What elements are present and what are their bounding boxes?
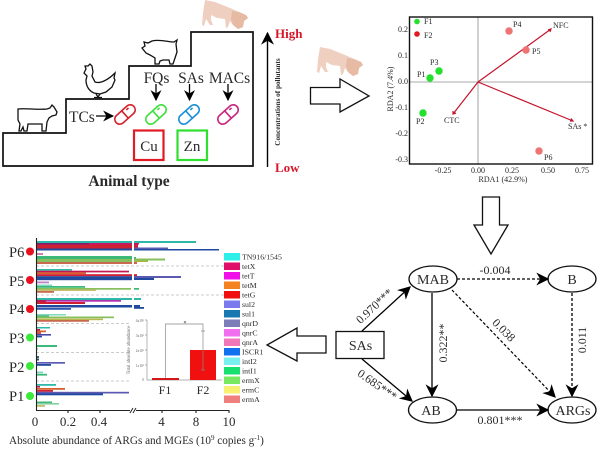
node: SAs: [336, 332, 384, 358]
coefficients: 0.322**: [436, 324, 450, 362]
x axis title: 9: [211, 434, 215, 442]
inset axes: [145, 320, 222, 380]
icon: chicken: [84, 64, 115, 98]
bars P1: [36, 384, 129, 407]
icon: photo pig middle: [317, 47, 363, 76]
bars P6: [36, 241, 219, 264]
inset tick labels: 0: [142, 378, 144, 382]
icon: blue capsule: [177, 103, 201, 126]
legend: qnrA: [242, 338, 258, 347]
y tick labels: -0.3: [395, 155, 408, 164]
arrow: MAB to ARGs: [452, 290, 555, 397]
RDA legend: F1: [424, 17, 432, 26]
inset tick labels: 4x10³: [136, 319, 145, 323]
arrow: MACs: [227, 84, 229, 100]
node: ARGs: ARGs: [555, 404, 591, 419]
green points: [419, 67, 443, 117]
arrow: AB to ARGs: [457, 409, 548, 411]
label: concentrations of pollutants: Concentrations of pollutants: [274, 58, 282, 146]
legend: qnrD: [242, 319, 258, 328]
legend: [224, 252, 282, 404]
legend: ermC: [242, 386, 259, 394]
icon: red capsule: [113, 103, 137, 126]
x tick labels: 10: [222, 414, 236, 429]
x axis title: ): [260, 435, 264, 447]
bars P2: [36, 356, 65, 376]
x tick labels: -0.25: [435, 166, 451, 175]
icon: cow: [18, 105, 57, 131]
axes: [36, 238, 230, 413]
sample labels and dots: P5: [9, 274, 24, 290]
arrow: B to ARGs: [571, 293, 573, 396]
legend: tetX: [242, 262, 256, 271]
node: AB: [408, 397, 456, 423]
sample labels and dots: P1: [9, 389, 24, 405]
point labels: P4: [513, 20, 521, 29]
legend: ermA: [242, 395, 260, 404]
y tick labels: 0.2: [398, 25, 408, 34]
coefficients: 0.011: [575, 327, 589, 353]
node: B: B: [567, 273, 577, 288]
point labels: P6: [544, 153, 552, 162]
staircase outline: [3, 32, 253, 166]
icon: photo pig top: [202, 0, 248, 29]
x tick labels: [32, 414, 236, 429]
inset labels: [159, 383, 209, 397]
point labels: [416, 20, 552, 162]
point labels: P3: [430, 58, 438, 67]
sample labels and dots: P3: [9, 331, 24, 347]
bar F2: [190, 350, 216, 380]
label: TCs: TCs: [69, 109, 95, 126]
legend: ISCR1: [242, 348, 263, 356]
arrow: RDA to SEM: [474, 197, 508, 254]
arrow: FQs: [155, 84, 157, 100]
box: Zn: [178, 130, 207, 160]
legend: TN916/1545: [242, 252, 282, 262]
arrow: SAs: [188, 84, 190, 100]
inset labels: F2: [197, 383, 209, 397]
x axis title: Absolute abundance of ARGs and MGEs (10: [9, 435, 211, 447]
label: FQs: FQs: [144, 70, 169, 87]
legend: tetG: [242, 290, 256, 300]
x tick labels: 0.00: [471, 166, 485, 175]
significance star: *: [184, 321, 186, 327]
point labels: P2: [416, 117, 424, 126]
legend: sul1: [242, 310, 255, 318]
label: High: High: [275, 26, 303, 41]
panel: path model: [336, 263, 596, 427]
concentration axis: [268, 26, 303, 175]
sample labels and dots: [9, 245, 34, 405]
points: [505, 27, 543, 155]
label: Low: Low: [275, 160, 300, 175]
coefficients: -0.004: [480, 263, 510, 277]
coefficients: 0.801***: [478, 413, 522, 427]
icon: magenta capsule: [216, 103, 240, 126]
point labels: P1: [417, 70, 425, 79]
vector labels: SAs *: [568, 122, 587, 131]
heading: animal type: Animal type: [88, 173, 170, 190]
zero lines: [409, 18, 593, 164]
arrow: SAs to AB: [362, 359, 412, 401]
x tick labels: 4: [158, 414, 165, 429]
legend: sul2: [242, 300, 255, 309]
arrow: TCs to capsule: [96, 115, 113, 117]
panel: RDA plot: [386, 17, 593, 184]
y axis title: RDA2 (7.4%): [386, 66, 395, 111]
axis break: [130, 408, 136, 413]
node: MAB: MAB: [417, 273, 449, 288]
plot frame: [410, 17, 592, 164]
x tick labels: 0.2: [60, 414, 76, 429]
label: SAs: SAs: [178, 70, 204, 87]
coefficients: 0.970***: [353, 286, 396, 327]
panel: bar chart: [9, 238, 282, 447]
y tick labels: -0.1: [395, 103, 408, 112]
x axis title: RDA1 (42.9%): [479, 175, 528, 184]
x tick labels: [435, 166, 589, 175]
legend: tetT: [242, 272, 255, 280]
box: Cu: [134, 130, 164, 160]
box: Zn: Zn: [184, 139, 201, 155]
y tick labels: -0.2: [395, 129, 408, 138]
bars P3: [36, 327, 57, 350]
icon: black pig: [142, 40, 177, 64]
inset tick labels: [136, 319, 145, 382]
arrow: MAB to B: [457, 278, 548, 280]
sample labels and dots: P4: [9, 302, 25, 318]
legend: intI1: [242, 366, 257, 376]
bars P4: [36, 298, 144, 322]
vector labels: CTC: [444, 116, 460, 125]
arrow: SAs to bar chart: [267, 328, 326, 361]
coefficients: 0.685***: [355, 366, 400, 403]
node: SAs: SAs: [349, 339, 372, 354]
x tick labels: 0.4: [91, 414, 108, 429]
RDA legend: F2: [424, 31, 432, 40]
arrow: MAB to AB: [431, 293, 433, 396]
x tick labels: 0.50: [541, 166, 555, 175]
inset labels: F1: [159, 383, 171, 397]
y tick labels: 0.0: [398, 77, 408, 86]
x tick labels: 8: [193, 414, 199, 429]
icon: green capsule: [144, 103, 168, 126]
vector labels: [444, 21, 587, 131]
RDA legend: [414, 17, 432, 40]
x tick labels: 0: [32, 414, 38, 429]
sample labels and dots: P6: [9, 245, 24, 261]
significance bracket: [166, 324, 205, 378]
panel: animal type staircase: [3, 0, 253, 166]
inset tick labels: 1x10³: [136, 364, 145, 368]
legend: intI2: [242, 357, 257, 366]
sample labels and dots: P2: [9, 360, 24, 376]
inset tick labels: 3x10³: [136, 334, 145, 338]
arrow: staircase to RDA: [310, 79, 369, 112]
x tick labels: 0.75: [575, 166, 589, 175]
node: AB: AB: [421, 404, 441, 419]
label: MACs: MACs: [209, 70, 250, 87]
legend: tetM: [242, 281, 257, 290]
vectors: [453, 29, 573, 121]
node: MAB: [409, 266, 457, 292]
coefficients: [353, 263, 589, 427]
inset y label: Total absolute abundance: [127, 326, 132, 374]
vector labels: NFC: [553, 21, 569, 30]
node: B: [548, 266, 596, 292]
y tick labels: [395, 25, 408, 164]
legend: ermX: [242, 376, 260, 385]
point labels: P5: [532, 47, 540, 56]
group separators: [36, 266, 224, 381]
bar F1: [152, 378, 179, 380]
coefficients: 0.038: [489, 316, 518, 345]
bars P5: [36, 269, 181, 293]
arrow: SAs to MAB: [362, 287, 410, 331]
arrow: concentration: [266, 33, 268, 167]
node: ARGs: [548, 397, 596, 423]
inset bar chart: [127, 319, 222, 397]
x axis title: -1: [254, 434, 261, 442]
legend: qnrC: [242, 328, 258, 338]
box: Cu: Cu: [140, 139, 158, 155]
x tick labels: 0.25: [505, 166, 519, 175]
inset tick labels: 2x10³: [136, 349, 145, 353]
y tick labels: 0.1: [398, 51, 408, 60]
x axis title: copies g: [214, 435, 255, 447]
